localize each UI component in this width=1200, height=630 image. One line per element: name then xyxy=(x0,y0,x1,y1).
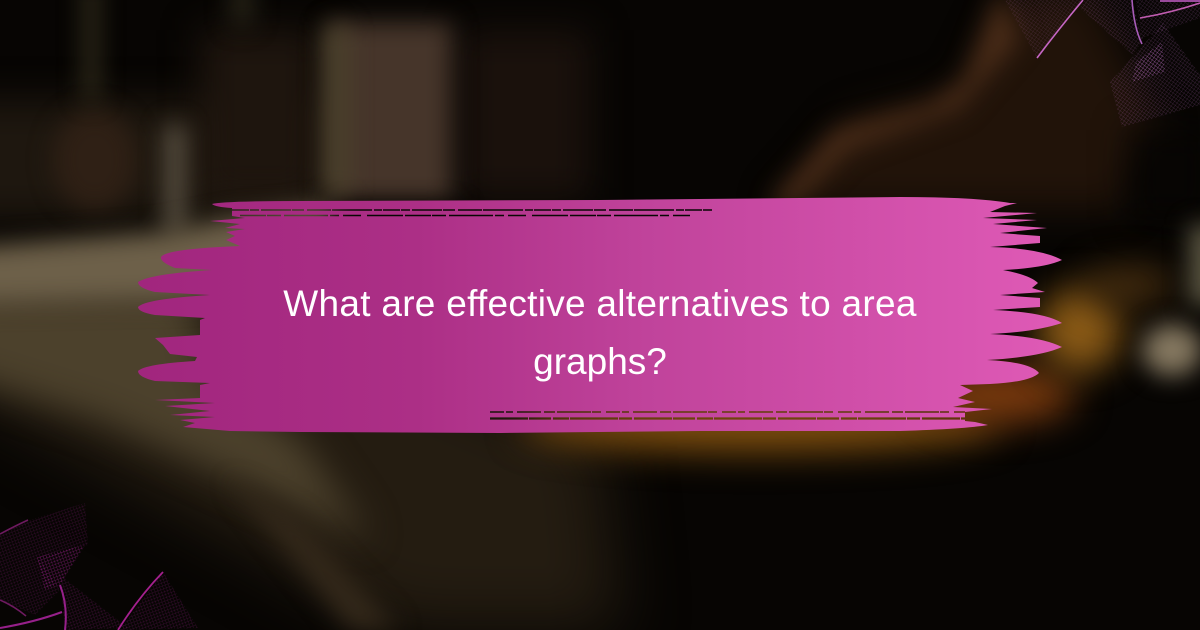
title line 1: What are effective alternatives to area xyxy=(283,283,917,324)
hand xyxy=(770,0,1160,210)
floor haze xyxy=(0,285,620,630)
mesh decoration: bottom left xyxy=(0,503,198,630)
lamp glow xyxy=(520,399,1000,451)
pale highlights right xyxy=(1142,324,1200,376)
mesh decoration: top right xyxy=(1005,0,1200,127)
title line 2: graphs? xyxy=(533,341,667,382)
brush stroke banner xyxy=(138,197,1062,433)
